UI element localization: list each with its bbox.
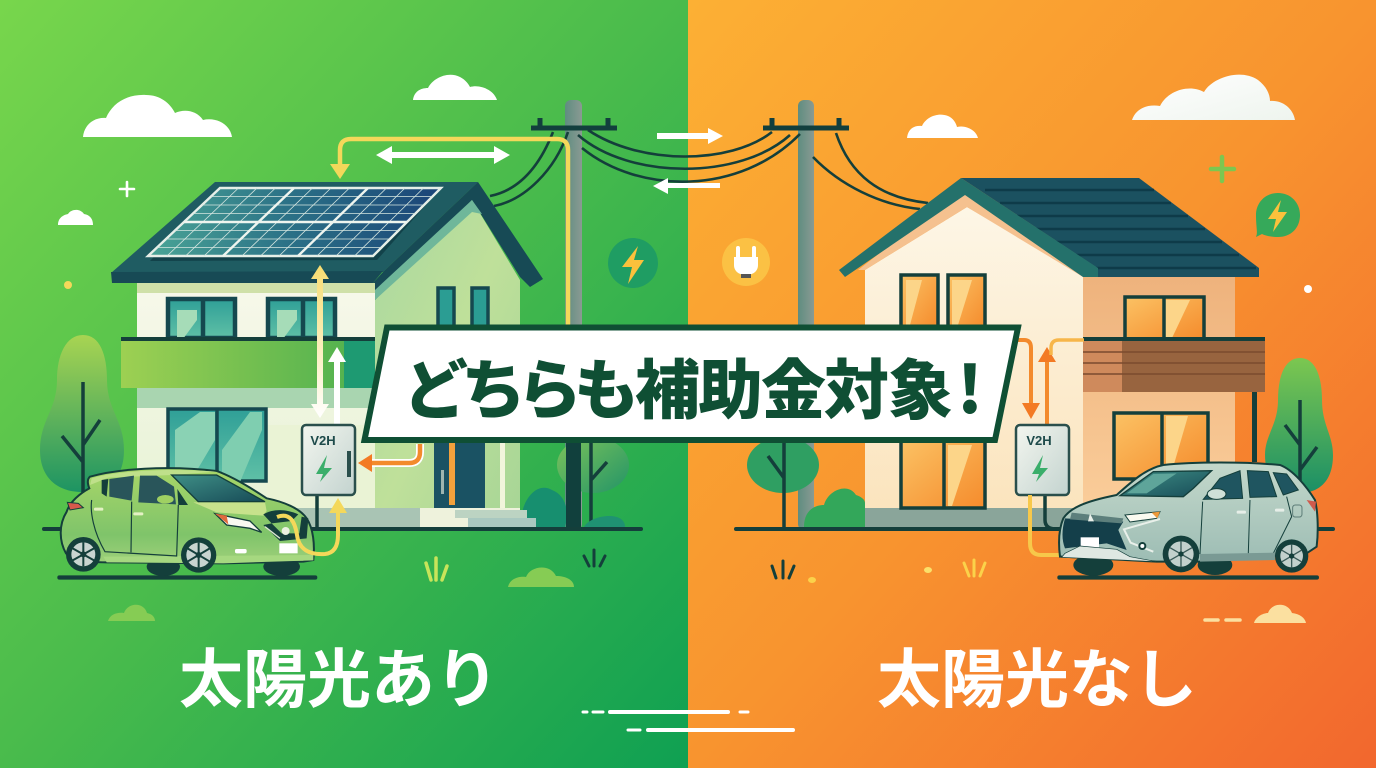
yellow cable right	[1030, 495, 1064, 555]
front wall	[865, 207, 1083, 527]
ground line left	[42, 527, 643, 531]
gable trim	[839, 178, 1098, 277]
cloud: right large	[1132, 75, 1295, 120]
tree and shrub right of left house	[521, 437, 629, 528]
tree behind left house	[40, 335, 124, 495]
ground dashes: bottom right	[1205, 618, 1240, 622]
left car	[57, 468, 317, 580]
V2H charger right	[1016, 425, 1069, 529]
side wall	[375, 200, 520, 527]
arrow: orange house to V2H	[358, 444, 420, 472]
dot: white	[1304, 285, 1312, 293]
balcony	[121, 337, 375, 388]
arrow: white up to house	[328, 347, 346, 424]
arrow: yellow grid line to roof	[330, 139, 568, 330]
roof	[111, 182, 478, 273]
cloud: left small	[58, 210, 93, 225]
V2H charger right: V2H	[1026, 433, 1052, 448]
right utility pole	[763, 100, 849, 530]
foundation	[865, 508, 1085, 527]
cloud: right small	[907, 115, 978, 138]
grass tuft: right dark	[772, 561, 794, 578]
sparkle: white plus	[120, 182, 134, 196]
upper right window	[1125, 297, 1204, 339]
bush: bottom right	[1254, 605, 1306, 623]
lower right window	[1114, 413, 1208, 479]
cloud: left large	[83, 95, 232, 137]
side windows	[438, 288, 488, 328]
panel: left green background	[0, 0, 688, 768]
balcony wood	[1083, 337, 1265, 462]
V2H charger left	[302, 425, 355, 528]
bush: small green	[508, 567, 574, 587]
tree left of right house	[747, 437, 819, 528]
dot: yellow	[64, 281, 72, 289]
icon: green bolt speech bubble	[1256, 193, 1300, 237]
decorative dashes: bottom centre	[583, 712, 793, 730]
bush: bottom left	[108, 605, 155, 621]
ground floor window	[168, 409, 266, 482]
solar panel	[148, 188, 441, 261]
heading: with solar: 太陽光あり	[179, 629, 499, 721]
heading: without solar: 太陽光なし	[877, 629, 1197, 721]
side wall	[1083, 272, 1235, 527]
upper left windows	[901, 275, 985, 327]
icon: plug on yellow circle	[722, 238, 770, 286]
foundation	[137, 508, 520, 528]
shrub right house	[804, 488, 865, 527]
arrow: grid top white double arrow	[376, 146, 510, 164]
tree right of right house	[1265, 358, 1333, 500]
dots: right ground	[808, 567, 932, 583]
cloud: top centre	[413, 75, 497, 100]
door	[434, 443, 485, 508]
power lines	[490, 130, 928, 209]
arrows: orange V2H right	[1018, 340, 1084, 424]
house: without solar panels	[839, 178, 1265, 527]
grass tuft: left dark	[584, 550, 605, 566]
arrow: white pole-to-pole left	[653, 178, 720, 194]
grass tuft: right yellow	[964, 560, 985, 576]
arrow: white pole-to-pole right	[657, 128, 723, 144]
icon: green bolt circle	[608, 238, 658, 288]
arrow: yellow cable car to V2H	[277, 498, 347, 554]
panel: right orange background	[688, 0, 1376, 768]
main roof	[961, 178, 1259, 277]
left utility pole	[531, 100, 617, 530]
upper windows	[168, 299, 335, 339]
arrow: solar to V2H double arrow	[311, 265, 329, 418]
sparkle: green plus	[1211, 157, 1234, 181]
right car	[1057, 462, 1319, 580]
V2H charger left: V2H	[310, 433, 336, 448]
lower left window	[901, 440, 985, 508]
front wall	[137, 283, 375, 527]
ground line right	[734, 527, 1335, 531]
house: with solar panels	[111, 182, 543, 528]
subsidy banner: どちらも補助金対象!	[403, 338, 983, 432]
grass tuft: left yellow	[426, 558, 447, 580]
